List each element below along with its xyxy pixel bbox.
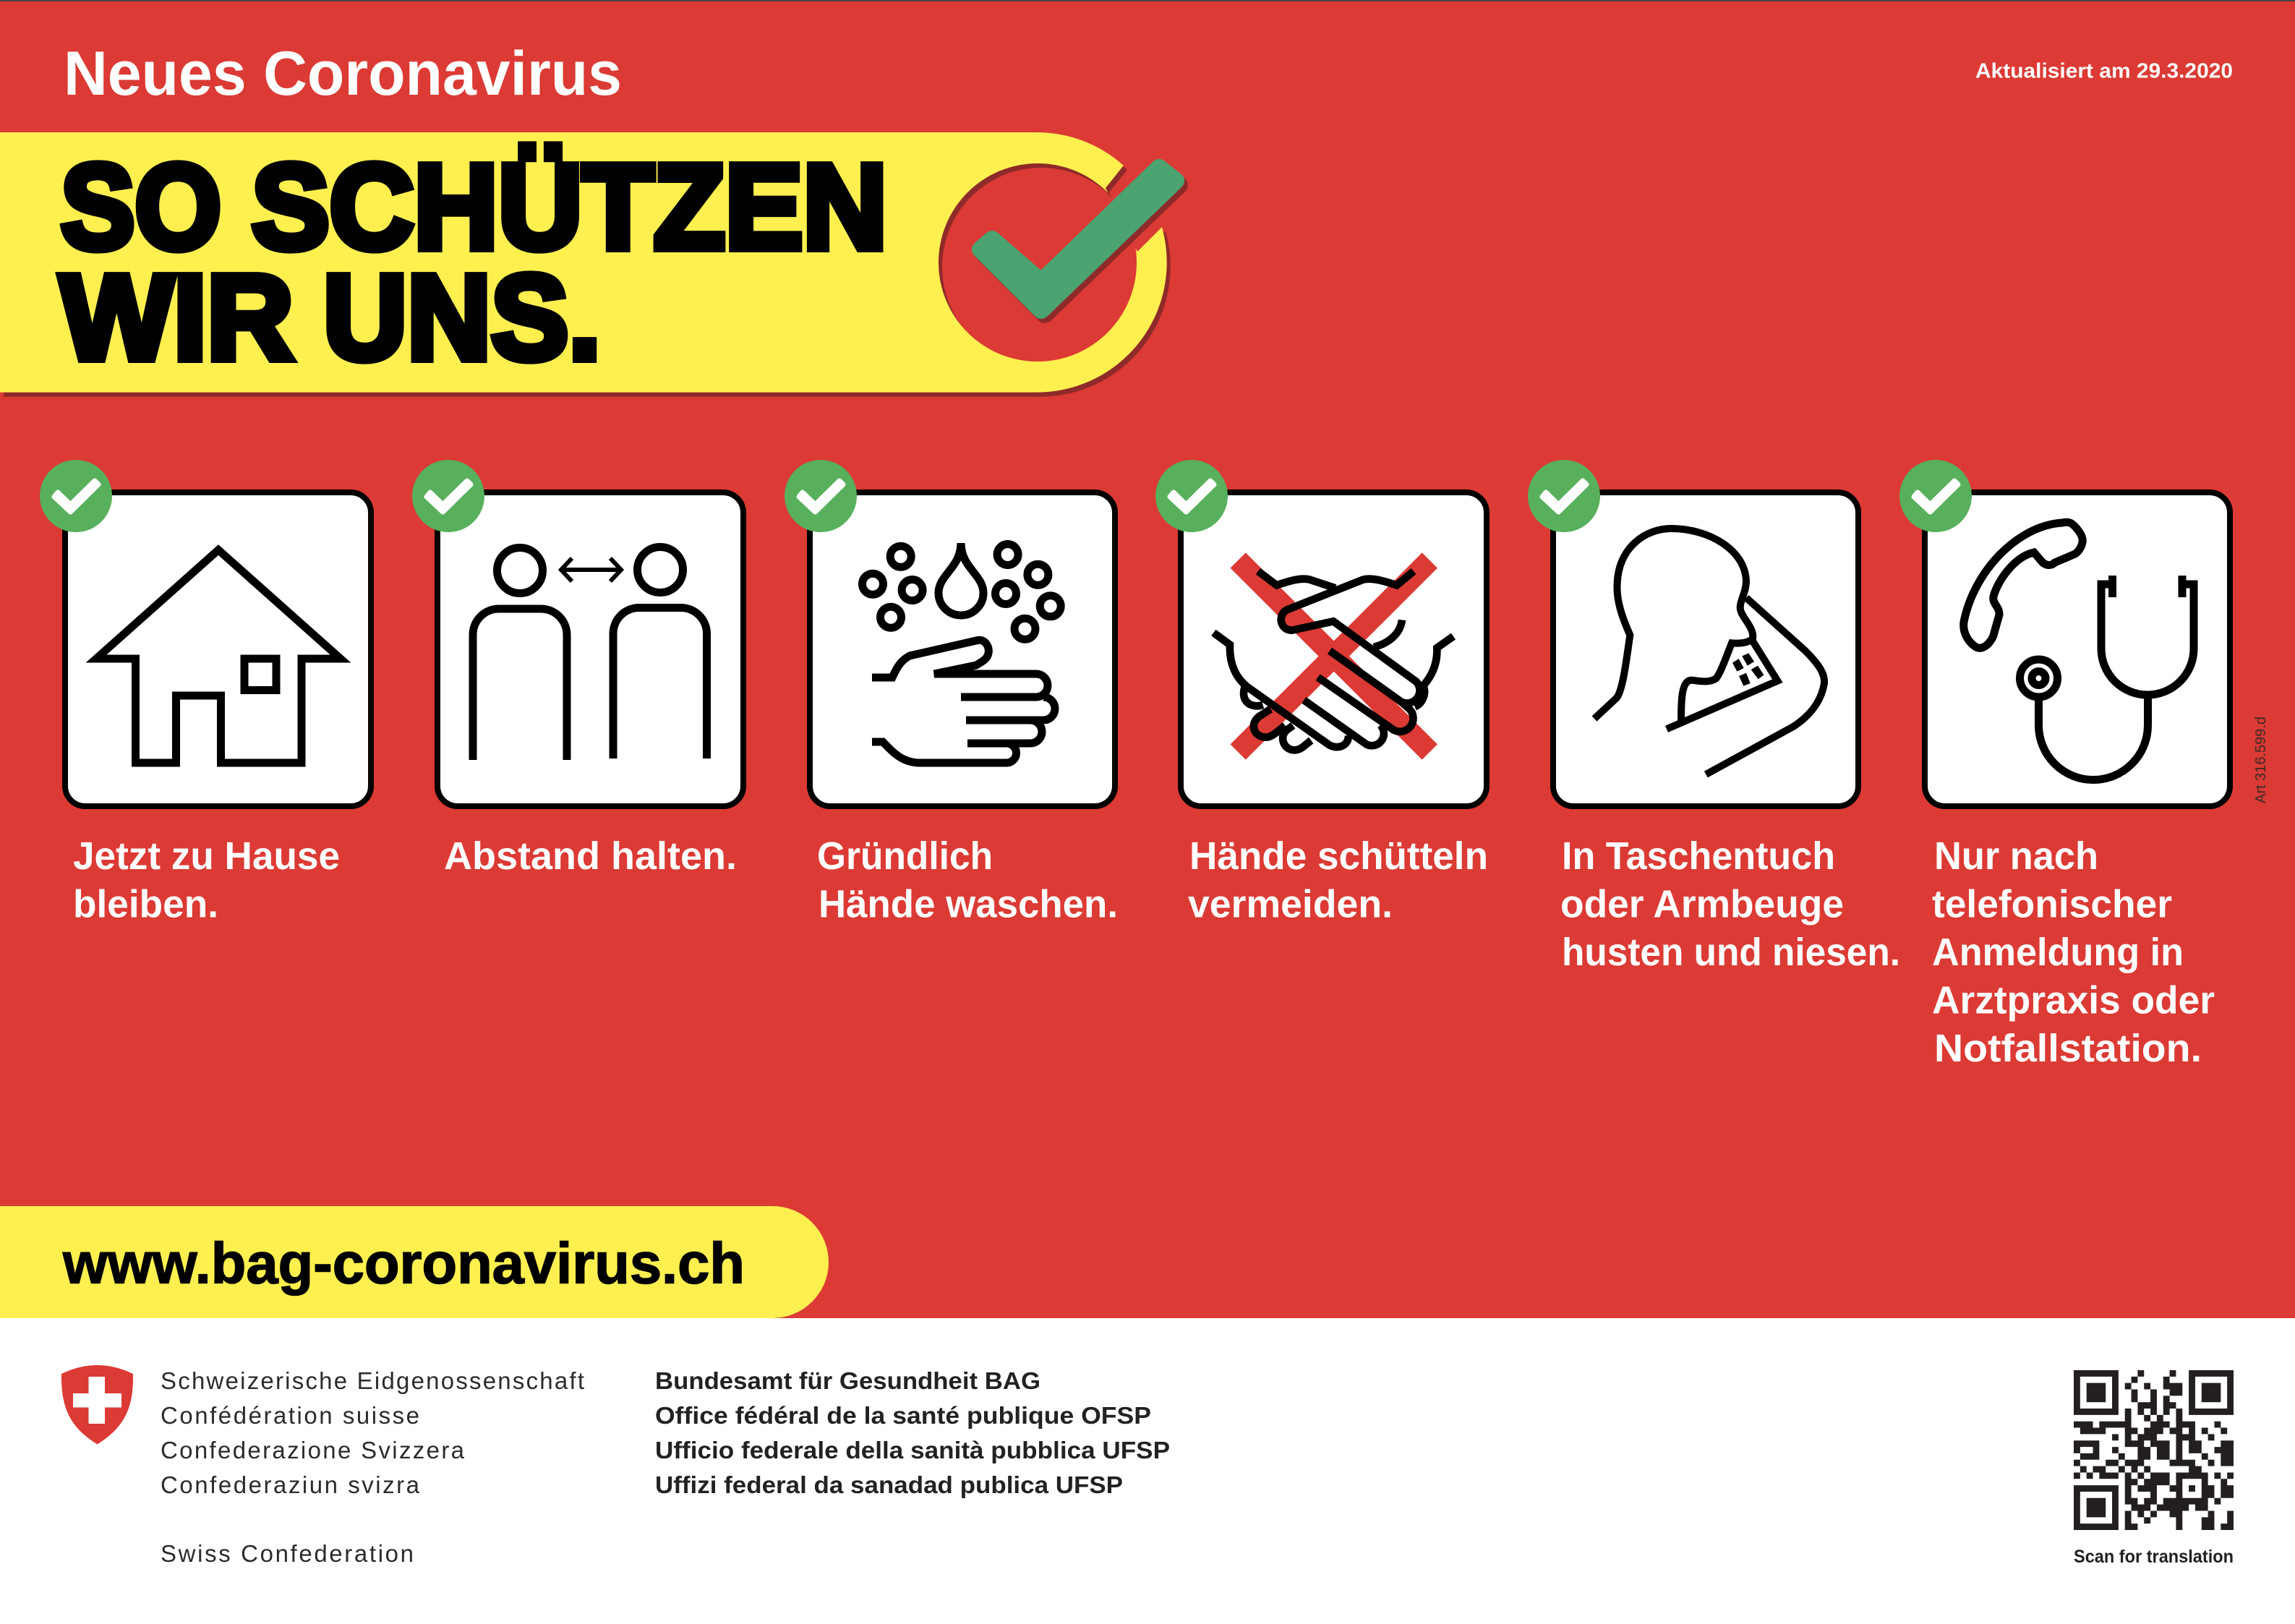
heading: Neues Coronavirus: Neues Coronavirus <box>64 39 622 108</box>
badge: check <box>1528 460 1600 532</box>
panel: cough into tissue or elbow <box>1528 460 1900 974</box>
title text: SCHÜTZEN <box>252 140 887 275</box>
confederation names: Swiss Confederation <box>161 1540 414 1567</box>
label <box>73 834 340 926</box>
confederation names: Confédération suisse <box>161 1402 419 1429</box>
label: Hände waschen. <box>819 882 1118 926</box>
title text <box>60 140 887 385</box>
label <box>1560 834 1900 974</box>
icon: stethoscope <box>2020 576 2194 779</box>
icon: crossed-out handshake <box>1213 560 1453 752</box>
label: vermeiden. <box>1188 882 1393 926</box>
confederation names: Confederaziun svizra <box>161 1471 420 1498</box>
white footer background <box>0 1318 2295 1624</box>
icon: house <box>96 550 341 763</box>
label: Anmeldung in <box>1932 931 2184 974</box>
label: husten und niesen. <box>1562 931 1900 974</box>
federal office names: Ufficio federale della sanità pubblica UFSP <box>655 1437 1170 1463</box>
badge: check <box>785 460 857 532</box>
label: Abstand halten. <box>444 834 737 878</box>
url pill <box>0 1206 829 1318</box>
url text: www.bag-coronavirus.ch <box>62 1231 745 1296</box>
badge: check <box>1155 460 1228 532</box>
icon: person coughing into elbow <box>1594 529 1824 774</box>
label: Jetzt zu Hause <box>73 834 340 878</box>
federal office names: Uffizi federal da sanadad publica UFSP <box>655 1471 1123 1498</box>
label: Notfallstation. <box>1934 1027 2202 1070</box>
confederation names <box>161 1367 584 1567</box>
label: Hände schütteln <box>1189 834 1488 878</box>
panel: avoid handshakes <box>1155 460 1488 926</box>
badge: check <box>40 460 112 532</box>
label <box>1188 834 1488 926</box>
federal office names: Bundesamt für Gesundheit BAG <box>655 1367 1040 1394</box>
update date: Aktualisiert am 29.3.2020 <box>1975 59 2233 82</box>
title banner <box>0 132 1179 397</box>
label: bleiben. <box>73 882 218 926</box>
federal office names: Office fédéral de la santé publique OFSP <box>655 1402 1151 1429</box>
icon: hand with drop and bubbles <box>862 543 1061 763</box>
qr caption: Scan for translation <box>2074 1547 2234 1567</box>
confederation names: Confederazione Svizzera <box>161 1437 465 1463</box>
panel: phone first <box>1899 460 2230 1070</box>
label: Arztpraxis oder <box>1932 979 2215 1022</box>
article number: Art 316.599.d <box>2253 717 2269 803</box>
label: oder Armbeuge <box>1560 882 1844 926</box>
title text: WIR <box>60 250 294 385</box>
title text: UNS. <box>323 250 601 385</box>
label: Gründlich <box>817 834 993 878</box>
qr code <box>2074 1370 2234 1530</box>
icon: telephone handset <box>1964 522 2082 648</box>
label <box>1932 834 2215 1070</box>
panel: wash hands <box>785 460 1118 926</box>
icon: two people with arrow <box>473 547 707 760</box>
confederation names: Schweizerische Eidgenossenschaft <box>161 1367 584 1394</box>
label <box>817 834 1118 926</box>
icon: swiss shield <box>61 1365 133 1445</box>
title text: SO <box>61 140 221 275</box>
label: telefonischer <box>1932 882 2172 926</box>
badge: check <box>1899 460 1972 532</box>
panel: keep distance <box>412 460 743 878</box>
label: Nur nach <box>1934 834 2098 878</box>
label: In Taschentuch <box>1562 834 1835 878</box>
federal office names <box>655 1367 1170 1498</box>
badge: check <box>412 460 484 532</box>
panel: stay home <box>40 460 371 926</box>
icon: big check mark <box>980 168 1179 315</box>
